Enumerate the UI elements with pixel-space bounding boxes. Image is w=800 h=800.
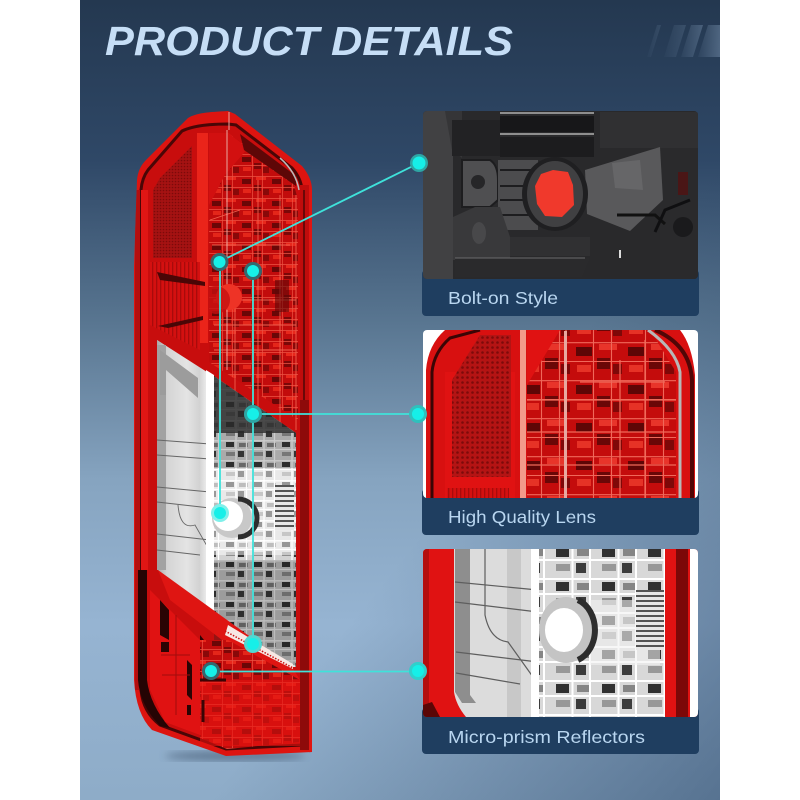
panel 3 bulb: [539, 597, 593, 663]
amber bulb spot: [216, 284, 242, 310]
panel: High Quality Lens: [422, 330, 699, 535]
upper lens highlights: [210, 180, 296, 430]
ribbed section: [150, 262, 200, 350]
panel: Bolt-on Style: [422, 111, 699, 316]
panel 1 caption bar: [422, 270, 699, 316]
top grey wedge: [166, 354, 198, 398]
decorative stripes: [647, 25, 720, 57]
panel 3 fins: [636, 590, 664, 650]
connector lines: [211, 163, 419, 672]
prism reflector: [214, 376, 296, 667]
dot: panel 1: [410, 154, 428, 172]
lower left black grid: [160, 600, 204, 715]
panel 2 strip: [520, 330, 526, 498]
panel 3 label: Micro-prism Reflectors: [448, 727, 645, 747]
right housing: [585, 147, 663, 231]
title: PRODUCT DETAILS: [105, 18, 513, 64]
dot: lower lens: [202, 662, 220, 680]
dark lens patch: [275, 280, 289, 312]
connector dots: [202, 154, 428, 680]
dot: bulb: [211, 504, 229, 522]
panel 3 photo: reflector close-up: [423, 549, 698, 717]
panel 3 right frame: [665, 549, 690, 717]
panel 3 prism field: [539, 549, 665, 717]
dot: panel 3: [409, 662, 427, 680]
dot: strip: [244, 635, 262, 653]
lower blocks: [453, 207, 510, 260]
finned vents: [275, 485, 294, 530]
panel 3 caption bar: [422, 708, 699, 754]
bulb: [212, 498, 252, 538]
center body: [498, 160, 538, 230]
reflector: [153, 146, 192, 258]
socket ring: [522, 157, 588, 231]
red plug: [535, 170, 574, 217]
panel 1 label: Bolt-on Style: [448, 288, 558, 308]
panel: Micro-prism Reflectors: [422, 549, 699, 754]
panel 2 photo: red lens close-up: [423, 330, 698, 498]
panel 2 prism field: [527, 330, 676, 498]
upper lens: [209, 133, 298, 420]
dot: lens top left: [210, 253, 228, 271]
lamp shadow: [165, 751, 305, 761]
wiring and bolt: [617, 215, 665, 224]
vertical seam: [227, 112, 229, 370]
background panel: [80, 0, 720, 800]
lower right lens: [200, 640, 300, 749]
white strip: [206, 370, 214, 622]
divider column: [197, 133, 208, 343]
dark inner rim: [141, 124, 302, 749]
white serrated strip: [225, 625, 293, 669]
lower left lens: [150, 590, 200, 735]
tail light product photo: [130, 105, 320, 765]
bright middle glare: [214, 470, 296, 555]
right dark band: [300, 400, 309, 750]
lower left black band: [138, 570, 170, 728]
outer housing: [130, 105, 320, 765]
panel 2 caption bar: [422, 489, 699, 535]
flat left panel: [157, 340, 207, 612]
dot: lens top right: [244, 262, 262, 280]
panel 2 reflector: [452, 335, 511, 477]
panel 2 ribs: [447, 488, 509, 498]
dot: lens center: [244, 405, 262, 423]
panel 3 grey panel: [454, 549, 532, 717]
left frame highlights: [135, 190, 140, 690]
dot: panel 2: [409, 405, 427, 423]
left panel wires: [157, 440, 206, 556]
lower frame band: [158, 570, 300, 680]
panel 2 label: High Quality Lens: [448, 507, 596, 527]
panel 3 left red frame: [423, 549, 429, 717]
bracket tab: [462, 160, 498, 207]
white reflector zone: [157, 340, 296, 667]
panel 3 white strip: [531, 549, 539, 717]
dark area at top of prism: [214, 376, 296, 433]
panel 1 photo: mounting bracket: [423, 111, 698, 279]
